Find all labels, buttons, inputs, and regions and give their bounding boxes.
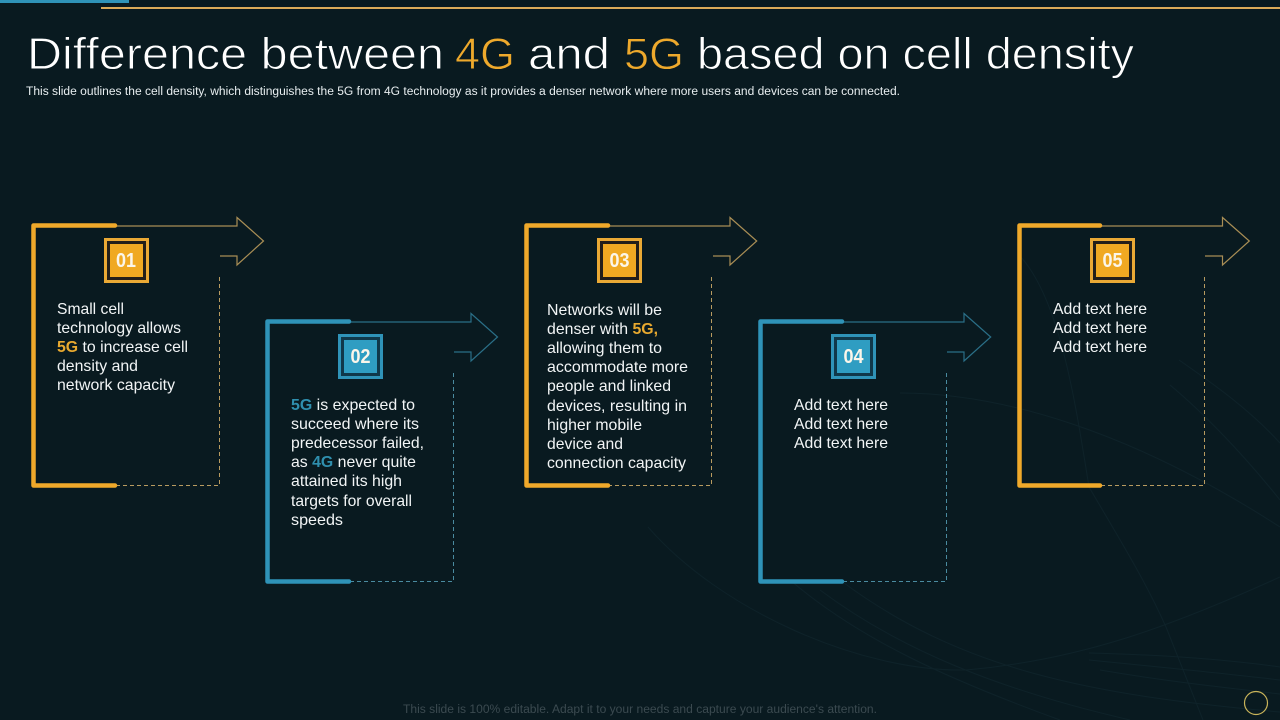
text 02: 5G is expected to bbox=[291, 397, 415, 414]
text 01: technology allows bbox=[57, 320, 181, 337]
arrow outline 05 bbox=[1101, 218, 1249, 265]
text 03: accommodate more bbox=[547, 359, 688, 376]
dashed frame 05 bbox=[1101, 277, 1204, 486]
title: 4G bbox=[455, 30, 515, 79]
badge 01 bbox=[104, 238, 149, 283]
text 01: density and bbox=[57, 358, 138, 375]
text 05 bbox=[1053, 301, 1147, 356]
panel: step 02 bbox=[268, 314, 498, 582]
arrow outline 02 bbox=[350, 314, 498, 361]
panel: step 04 bbox=[760, 314, 991, 582]
arrow outline 04 bbox=[843, 314, 991, 361]
text 01: 5G to increase cell bbox=[57, 339, 188, 356]
dashed frame 03 bbox=[609, 277, 712, 486]
text 01: network capacity bbox=[57, 377, 175, 394]
subtitle: This slide outlines the cell density, which distinguishes the 5G from 4G technology as it provides a denser network where more users and devices can be connected. bbox=[26, 86, 900, 98]
text 04: Add text here bbox=[794, 435, 888, 452]
badge 04 bbox=[831, 334, 876, 379]
badge 01: 01 bbox=[116, 250, 136, 272]
text 02 bbox=[291, 397, 424, 529]
badge 03 bbox=[597, 238, 642, 283]
title: based on cell density bbox=[697, 30, 1135, 79]
text 02: as 4G never quite bbox=[291, 454, 416, 471]
text 02: predecessor failed, bbox=[291, 435, 424, 452]
title: and bbox=[528, 30, 610, 79]
title bbox=[27, 30, 1135, 79]
text 05: Add text here bbox=[1053, 301, 1147, 318]
dashed frame 04 bbox=[843, 373, 946, 582]
top accent bar: blue bbox=[0, 0, 129, 3]
text 03: denser with 5G, bbox=[547, 321, 658, 338]
text 04 bbox=[794, 397, 888, 452]
badge 03: 03 bbox=[610, 250, 630, 272]
text 05: Add text here bbox=[1053, 339, 1147, 356]
bracket 04 bbox=[760, 322, 842, 582]
dashed frame 01 bbox=[116, 277, 220, 486]
top accent line: gold bbox=[101, 7, 1280, 9]
text 04: Add text here bbox=[794, 397, 888, 414]
panel: step 03 bbox=[526, 218, 757, 486]
arrow outline 03 bbox=[609, 218, 757, 265]
dashed frame 02 bbox=[350, 373, 454, 582]
text 02: succeed where its bbox=[291, 416, 419, 433]
arrow outline 01 bbox=[116, 218, 264, 265]
bracket 01 bbox=[34, 226, 115, 486]
panel: step 01 bbox=[34, 218, 264, 486]
text 02: targets for overall bbox=[291, 493, 412, 510]
bracket 03 bbox=[526, 226, 608, 486]
text 03 bbox=[547, 302, 688, 472]
icon: page circle bbox=[1244, 692, 1268, 714]
title: Difference between bbox=[27, 30, 444, 79]
panel: step 05 bbox=[1020, 218, 1249, 486]
text 03: device and bbox=[547, 436, 623, 453]
text 02: attained its high bbox=[291, 473, 402, 490]
text 04: Add text here bbox=[794, 416, 888, 433]
bracket 05 bbox=[1020, 226, 1100, 486]
text 05: Add text here bbox=[1053, 320, 1147, 337]
badge 02: 02 bbox=[350, 346, 370, 368]
text 03: devices, resulting in bbox=[547, 398, 687, 415]
text 03: allowing them to bbox=[547, 340, 662, 357]
text 01: Small cell bbox=[57, 301, 124, 318]
text 03: Networks will be bbox=[547, 302, 662, 319]
badge 05: 05 bbox=[1102, 250, 1122, 272]
badge 04: 04 bbox=[844, 346, 864, 368]
text 03: connection capacity bbox=[547, 455, 686, 472]
text 03: higher mobile bbox=[547, 417, 642, 434]
badge 05 bbox=[1090, 238, 1135, 283]
text 03: people and linked bbox=[547, 378, 671, 395]
title: 5G bbox=[624, 30, 684, 79]
footer note: This slide is 100% editable. Adapt it to your needs and capture your audience's attention. bbox=[403, 704, 877, 716]
text 02: speeds bbox=[291, 512, 343, 529]
text 01 bbox=[57, 301, 188, 394]
bracket 02 bbox=[268, 322, 349, 582]
badge 02 bbox=[338, 334, 383, 379]
